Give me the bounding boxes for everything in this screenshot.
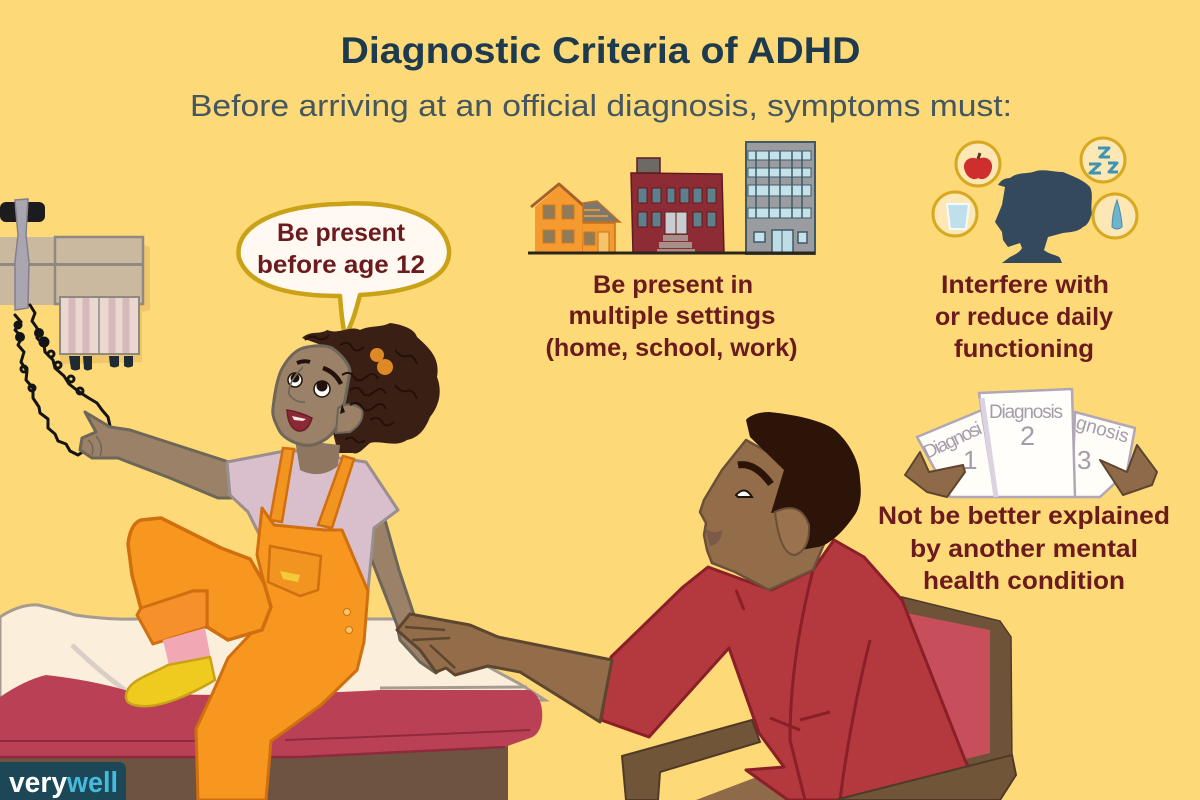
girl's head: [273, 335, 417, 474]
sheet 2: 2: [1020, 421, 1035, 451]
icon: school: [631, 158, 724, 254]
text: multiple settings: [546, 271, 798, 362]
text: daily functioning: Interfere with: [941, 271, 1109, 299]
curls: [305, 335, 417, 442]
icon: sleep zzz: [1081, 138, 1125, 182]
ground line: [528, 252, 815, 254]
text: not better explained: Not be better explained: [878, 502, 1170, 530]
sheet 1: Diagnosi: [920, 418, 985, 464]
chair back and near armrest: [622, 597, 1012, 800]
brows, eyes, nose, mouth: [297, 361, 310, 363]
sheet 1: 1: [963, 445, 977, 475]
icon: apple: [956, 142, 1000, 186]
text: multiple settings: Be present in: [593, 271, 753, 299]
man's red shirt: [601, 540, 985, 800]
speech bubble: be present before age 12: Be present: [277, 219, 406, 247]
girl's shirt: [227, 450, 398, 590]
speech bubble: be present before age 12: before age 12: [257, 251, 425, 279]
sheet 3: [1072, 412, 1135, 497]
text: not better explained: [878, 502, 1170, 595]
girl's other arm and hand: [360, 520, 468, 673]
verywell logo: very: [9, 767, 67, 799]
left hand: [905, 452, 965, 497]
ear: [336, 404, 362, 433]
verywell logo: well: [66, 767, 118, 799]
coiled cords: [15, 305, 110, 455]
chair far armrest: [835, 755, 1016, 800]
text: daily functioning: or reduce daily: [935, 303, 1113, 331]
verywell logo: [0, 762, 126, 800]
girl's pink sock and yellow shoe: [126, 628, 215, 706]
subtitle: Before arriving at an official diagnosis, symptoms must:: [190, 88, 1012, 123]
girl's raised arm and hand: [80, 412, 232, 498]
face: [273, 346, 350, 445]
sheet 3: gnosis: [1074, 413, 1131, 448]
text: not better explained: by another mental: [910, 535, 1138, 563]
sheet 3: 3: [1077, 445, 1091, 475]
man's leg: [696, 772, 800, 800]
man's head: [700, 412, 861, 590]
neck: [295, 440, 340, 474]
exam table: [0, 605, 545, 800]
girl's hair back: [302, 323, 440, 453]
sheet 2: [979, 389, 1075, 497]
text: multiple settings: (home, school, work): [546, 334, 798, 362]
man's arm and hand: [397, 614, 612, 722]
icon: office tower: [746, 142, 815, 254]
icon: silhouette: [995, 170, 1092, 263]
icon: hands holding three diagnosis sheets: [905, 389, 1157, 497]
text: daily functioning: functioning: [954, 335, 1094, 363]
icon: water drop: [1093, 194, 1137, 238]
sheet 1: [917, 410, 996, 497]
speech bubble: be present before age 12: [238, 203, 449, 336]
icon: house: [531, 184, 620, 253]
title: Diagnostic Criteria of ADHD: [340, 30, 860, 71]
right hand: [1100, 445, 1157, 495]
wall-mounted otoscope unit: [0, 199, 150, 370]
hair bow: [370, 348, 393, 375]
text: daily functioning: [935, 271, 1113, 363]
text: multiple settings: multiple settings: [568, 302, 776, 330]
text: not better explained: health condition: [923, 567, 1125, 595]
sheet 2: Diagnosis: [989, 402, 1063, 423]
icon: buildings (home, school, work): [528, 142, 815, 254]
icon: glass of water: [933, 192, 977, 236]
girl's orange overalls: [128, 448, 368, 800]
icon: head silhouette with daily needs: [933, 138, 1137, 263]
